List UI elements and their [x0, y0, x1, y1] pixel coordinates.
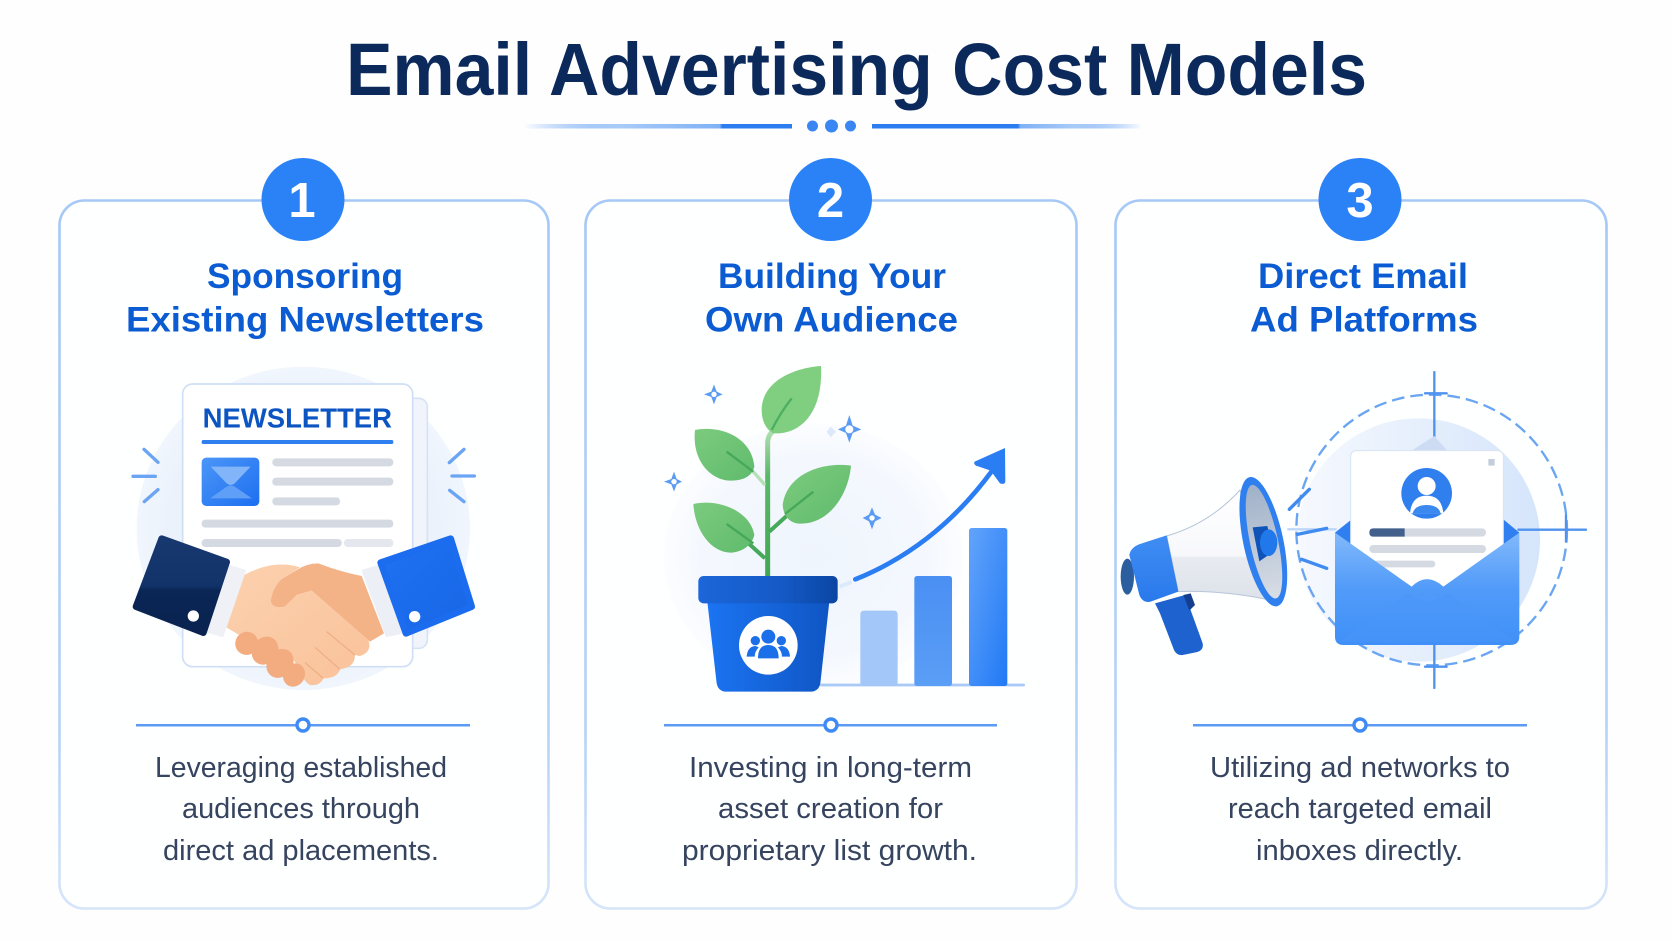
description 2: Investing in long-term: [689, 752, 972, 784]
illustration: megaphone and targeted email: [1121, 372, 1586, 688]
panel 2 card: [586, 200, 1076, 908]
heading 3: Ad Platforms: [1250, 300, 1478, 340]
description 3: reach targeted email: [1228, 793, 1492, 825]
number badge 3: 3: [1346, 174, 1374, 228]
panel 3: direct email ad platforms: [1116, 158, 1606, 908]
panel 1: sponsoring existing newsletters: [60, 158, 548, 908]
left cuff: [207, 566, 245, 636]
heading 3: Direct Email: [1258, 257, 1468, 296]
illustration: newsletter and handshake: [133, 367, 474, 691]
illustration: newsletter and handshake: NEWSLETTER: [203, 402, 392, 433]
title: Email Advertising Cost Models: [346, 28, 1367, 111]
left hand: [225, 565, 369, 685]
number badge 2: [789, 158, 872, 241]
description 1: Leveraging established: [155, 752, 447, 784]
separator 1: [136, 719, 470, 731]
panel 3 card: [1116, 200, 1606, 908]
number badge 3: [1318, 158, 1402, 241]
number badge 2: 2: [817, 174, 844, 228]
heading 2: [705, 257, 958, 340]
heading 1: Existing Newsletters: [126, 300, 484, 340]
megaphone: [1121, 559, 1134, 595]
title divider: [524, 120, 1142, 132]
separator 2: [664, 719, 997, 731]
description 2: asset creation for: [718, 793, 943, 825]
heading 3: [1250, 257, 1478, 340]
description 3: [1210, 752, 1510, 867]
description 1: audiences through: [182, 793, 420, 825]
heading 1: [126, 257, 484, 340]
fingers: [231, 628, 309, 691]
heading 2: Building Your: [718, 257, 946, 296]
illustration: plant and growth chart: [663, 366, 1025, 692]
description 1: [155, 752, 447, 867]
right cuff: [363, 566, 403, 636]
panel 2: building your own audience: [586, 158, 1076, 908]
panel 1 card: [60, 200, 548, 908]
heading 1: Sponsoring: [207, 257, 403, 296]
number badge 1: [262, 158, 344, 241]
description 3: Utilizing ad networks to: [1210, 752, 1510, 784]
number badge 1: 1: [288, 174, 316, 228]
description 2: proprietary list growth.: [682, 835, 977, 867]
heading 2: Own Audience: [705, 300, 958, 340]
right hand: [271, 563, 384, 642]
description 3: inboxes directly.: [1256, 835, 1463, 867]
description 1: direct ad placements.: [163, 835, 439, 867]
description 2: [682, 752, 977, 867]
separator 3: [1193, 719, 1527, 731]
